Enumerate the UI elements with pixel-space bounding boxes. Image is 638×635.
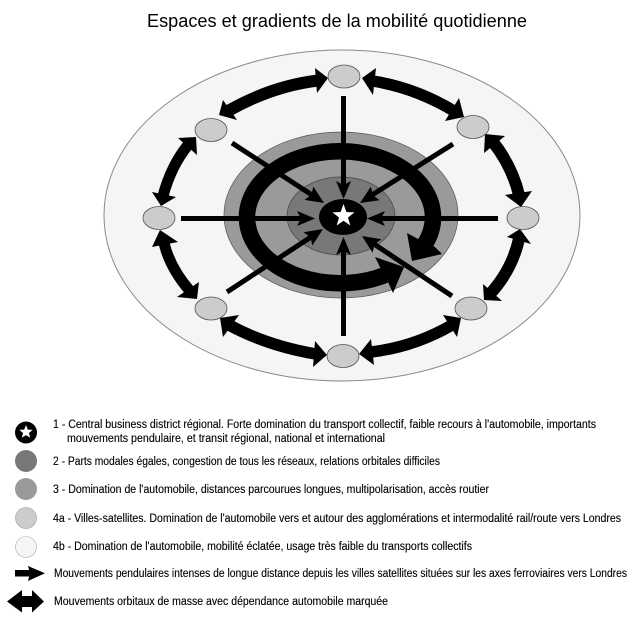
orbital arrow lower-right to right — [483, 229, 531, 301]
satellite towns — [143, 65, 539, 368]
orbital arrow upper-right to top — [362, 68, 464, 121]
legend item 3 — [15, 478, 489, 500]
zone 4b: outer ellipse — [104, 50, 580, 381]
orbital arrow bottom to lower-right — [359, 315, 461, 365]
zone 2: inner ellipse — [287, 177, 395, 255]
legend item 3: 3 - Domination de l'automobile, distances parcourues longues, multipolarisation, accès routier — [53, 484, 489, 496]
arrow south-east — [362, 236, 452, 296]
legend item 1: mouvements pendulaire, et transit régional, national et international — [67, 433, 385, 445]
title: Espaces et gradients de la mobilité quotidienne — [147, 11, 527, 31]
commuter arrows towards the centre — [181, 96, 498, 336]
arrow east — [367, 211, 498, 226]
arrow north-west — [232, 143, 324, 203]
orbital arrows between satellite towns — [152, 68, 532, 367]
legend item 2 — [15, 450, 440, 472]
orbital arrow left to lower-left — [152, 230, 199, 299]
orbital ring arrow around the centre — [247, 151, 442, 293]
orbital arrow right to upper-right — [484, 134, 532, 207]
arrow west — [181, 211, 315, 226]
legend item 4a — [16, 508, 621, 528]
arrow north — [336, 96, 351, 199]
legend item 1: 1 - Central business district régional. Forte domination du transport collectif, faible recours à l'automobile, importants — [53, 419, 596, 431]
zone 3: middle ellipse — [224, 132, 458, 298]
legend item: orbital arrow — [7, 590, 388, 612]
zone 1: central business district — [319, 199, 367, 235]
arrow south — [336, 237, 351, 336]
orbital arrow top to upper-left — [219, 68, 328, 120]
legend — [7, 419, 627, 612]
orbital arrow upper-left to left — [152, 137, 197, 206]
legend item: orbital arrow: Mouvements orbitaux de masse avec dépendance automobile marquée — [54, 596, 388, 608]
arrow south-west — [227, 229, 323, 292]
legend item 1 — [15, 419, 596, 445]
arrow north-east — [360, 144, 453, 203]
legend item 2: 2 - Parts modales égales, congestion de tous les réseaux, relations orbitales difficiles — [53, 456, 440, 468]
orbital arrow lower-left to bottom — [220, 315, 327, 367]
legend item 4b — [16, 536, 472, 558]
legend item 4b: 4b - Domination de l'automobile, mobilité éclatée, usage très faible du transports collectifs — [53, 541, 472, 553]
diagram: mobility zones — [104, 50, 580, 381]
